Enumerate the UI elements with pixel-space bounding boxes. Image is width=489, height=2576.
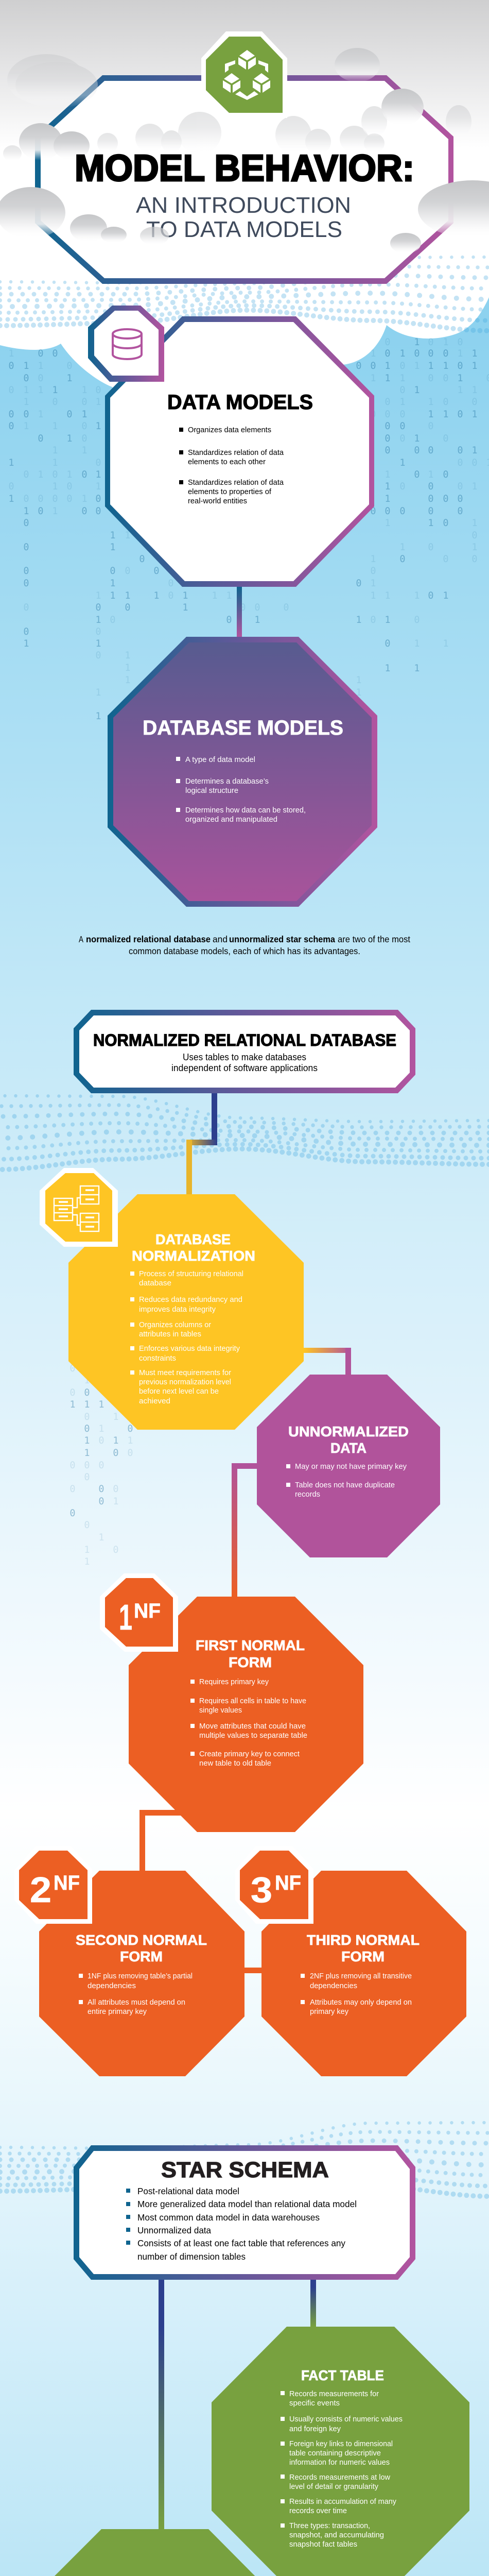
bullets: database normalization: before next level can be	[139, 1387, 219, 1396]
text: 01	[23, 373, 73, 384]
bullets: third normal form: 2NF plus removing all transitive	[310, 1972, 412, 1980]
bullets: first normal form: new table to old table	[199, 1759, 271, 1768]
text: 00	[38, 348, 58, 359]
text: 0	[356, 578, 362, 589]
bullets: data models: Standardizes relation of data	[188, 449, 284, 457]
text: 101	[95, 615, 260, 625]
text: 1	[98, 1532, 104, 1543]
subheading text: Uses tables to make databases	[183, 1052, 306, 1062]
bullets: database normalization	[130, 1270, 243, 1405]
text: 0	[110, 615, 116, 625]
text: 1111	[110, 590, 188, 601]
text: 000	[69, 1460, 104, 1471]
text: 1	[8, 457, 14, 468]
text: 111	[69, 1399, 104, 1410]
bullets: second normal form: dependencies	[88, 1982, 136, 1990]
text: 01	[23, 578, 116, 589]
panel: normalized relational database	[74, 1010, 415, 1093]
subheading text: independent of software applications	[171, 1063, 318, 1073]
heading: second normal form	[76, 1932, 207, 1964]
text: 10	[385, 481, 434, 492]
bullets: fact table: Three types: transaction,	[289, 2522, 370, 2530]
heading: database normalization: DATABASE	[155, 1231, 231, 1247]
text: 1	[113, 1496, 119, 1507]
text: 1	[98, 1423, 104, 1434]
bullets: first normal form: multiple values to separate table	[199, 1732, 307, 1740]
text: 11000	[370, 373, 489, 384]
text: 1	[52, 385, 58, 396]
text: 0	[98, 1484, 104, 1495]
text: 1	[414, 385, 420, 396]
bullets: data models: elements to each other	[188, 458, 266, 466]
text: 1101	[428, 409, 478, 420]
heading: star schema: STAR SCHEMA	[161, 2158, 329, 2182]
text block: intro: are two of the most	[338, 934, 410, 944]
heading: database models: DATABASE MODELS	[143, 717, 343, 739]
text block: intro: unnormalized star schema	[229, 934, 335, 944]
text: 11	[385, 469, 434, 480]
bullets: unnormalized data	[286, 1463, 407, 1499]
text: 100	[370, 554, 478, 565]
text: 000	[370, 409, 406, 420]
text block: intro: normalized relational database	[86, 934, 211, 944]
bullets: first normal form: Create primary key to connect	[199, 1750, 300, 1758]
bullets: fact table: and foreign key	[289, 2425, 341, 2433]
text: 11	[370, 348, 463, 359]
icon: 3NF badge: 3	[251, 1870, 272, 1910]
text: 1	[84, 1375, 90, 1386]
bullets: second normal form: entire primary key	[88, 2008, 147, 2016]
text: 0	[84, 1520, 90, 1531]
bullets: star schema: Consists of at least one fact table that references any	[137, 2238, 345, 2248]
text: 11	[385, 663, 420, 674]
panel: dimension table	[26, 2529, 284, 2576]
text: 11	[23, 638, 101, 649]
heading: first normal form: FORM	[229, 1654, 272, 1670]
bullets: database normalization: Organizes columns or	[139, 1321, 211, 1329]
heading: third normal form: THIRD NORMAL	[307, 1932, 420, 1948]
bullets: database models: logical structure	[185, 787, 238, 795]
text: 1	[95, 687, 101, 698]
text: 0	[38, 373, 44, 384]
text: 01	[38, 433, 73, 444]
bullets: database normalization: Reduces data redundancy and	[139, 1296, 242, 1304]
bullets: second normal form: 1NF plus removing table’s partial	[88, 1972, 193, 1980]
text: 0011101	[356, 361, 478, 371]
text: 10	[52, 457, 101, 468]
text: 11	[385, 373, 463, 384]
icon: green cubes badge	[201, 31, 287, 118]
heading: first normal form: FIRST NORMAL	[196, 1637, 305, 1653]
bullets: data models	[179, 426, 284, 505]
text: 0001	[8, 409, 88, 420]
text: 1	[8, 348, 14, 359]
heading: unnormalized data	[288, 1423, 409, 1456]
bullets: database models: Determines a database’s	[185, 777, 269, 786]
heading: unnormalized data: UNNORMALIZED	[288, 1423, 409, 1439]
text: 11	[84, 1435, 119, 1446]
bullets: third normal form: Attributes may only depend on	[310, 1998, 412, 2007]
text: 1	[125, 530, 131, 541]
icon: 2NF badge	[14, 1846, 92, 1924]
bullets: fact table: Records measurements at low	[289, 2473, 391, 2482]
bullets: data models: Standardizes relation of data	[188, 479, 284, 487]
text: 1001	[23, 397, 101, 408]
bullets: fact table: specific events	[289, 2399, 340, 2408]
text: 10	[38, 361, 73, 371]
text: 01	[23, 542, 116, 553]
text: 0010	[385, 337, 463, 348]
text: 10	[84, 1448, 119, 1459]
text block: intro: A	[79, 934, 83, 944]
bullets: database normalization: Process of structuring relational	[139, 1270, 243, 1278]
bullets: fact table: table containing descriptive	[289, 2449, 381, 2458]
panel: star schema	[74, 2145, 415, 2280]
bullets: first normal form: Requires all cells in table to have	[199, 1697, 306, 1705]
text: 101	[399, 542, 478, 553]
text: 1	[414, 337, 420, 348]
icon: 3NF badge: NF	[275, 1872, 301, 1894]
text: 0	[23, 518, 29, 529]
text: 0000	[23, 602, 289, 613]
bullets: star schema: More generalized data model than relational data model	[137, 2199, 357, 2209]
bullets: first normal form	[190, 1678, 307, 1768]
bullets: third normal form	[301, 1972, 412, 2016]
panel: database models	[108, 637, 377, 907]
panel: data models	[105, 316, 374, 587]
bullets: database normalization: attributes in tables	[139, 1330, 201, 1338]
text: 1	[125, 663, 131, 673]
bullets: third normal form: primary key	[310, 2008, 349, 2016]
text: 00	[370, 615, 420, 625]
heading: fact table: FACT TABLE	[301, 2367, 384, 2383]
text: 0	[84, 1387, 90, 1398]
bullets: database normalization: achieved	[139, 1397, 170, 1405]
icon: 2NF badge: NF	[54, 1872, 80, 1894]
subtitle: TO DATA MODELS	[146, 217, 342, 242]
text: 0	[84, 1472, 90, 1483]
text: 0	[399, 554, 406, 565]
text: 1	[38, 409, 44, 420]
text: 1	[52, 506, 58, 517]
text: 0	[139, 554, 145, 565]
text: 0	[69, 1387, 76, 1398]
text: 0	[69, 1363, 76, 1374]
bullets: star schema: Most common data model in data warehouses	[137, 2212, 320, 2223]
text: 01100	[385, 397, 478, 408]
bullets: database normalization: constraints	[139, 1354, 176, 1363]
bullets: database normalization: Must meet requirements for	[139, 1369, 231, 1377]
panel: second normal form	[39, 1871, 244, 2076]
text: 011	[399, 385, 478, 396]
subtitle	[136, 193, 351, 242]
text: 010001	[385, 348, 478, 359]
bullets: fact table: Records measurements for	[289, 2390, 379, 2398]
text: 1	[110, 530, 116, 541]
text: 0	[428, 421, 434, 432]
text: 110	[23, 421, 88, 432]
text: 00001	[385, 445, 478, 456]
panel: title	[35, 75, 453, 284]
icon: database badge	[88, 306, 164, 382]
text: 01	[95, 650, 131, 661]
icon: 1NF badge: 1	[119, 1597, 132, 1637]
bullets: fact table: records over time	[289, 2507, 347, 2515]
text: 0	[127, 1448, 133, 1459]
bullets: fact table: snapshot fact tables	[289, 2540, 357, 2549]
heading: second normal form: SECOND NORMAL	[76, 1932, 207, 1948]
text block: intro: and	[213, 934, 228, 944]
text: 0	[370, 566, 376, 577]
bullets: database normalization: database	[139, 1279, 171, 1287]
text: 0	[471, 530, 478, 541]
bullets: first normal form: Move attributes that could have	[199, 1722, 306, 1731]
bullets: star schema: Unnormalized data	[137, 2225, 211, 2235]
text: 1	[356, 675, 362, 686]
text: 1	[370, 578, 376, 589]
bullets: data models: elements to properties of	[188, 488, 272, 496]
heading: third normal form	[307, 1932, 420, 1964]
text: 1	[95, 711, 101, 722]
text: 1000	[23, 506, 101, 517]
heading: second normal form: FORM	[120, 1948, 163, 1964]
bullets: first normal form: Requires primary key	[199, 1678, 269, 1686]
title text: MODEL BEHAVIOR:	[75, 148, 414, 189]
panel: third normal form	[261, 1871, 466, 2076]
text: 0	[385, 638, 391, 649]
bullets: second normal form: All attributes must depend on	[88, 1998, 185, 2007]
panel: unnormalized data	[257, 1375, 440, 1557]
bullets: fact table: information for numeric values	[289, 2459, 390, 2467]
panel: database normalization	[68, 1194, 304, 1430]
text: 0	[127, 1423, 133, 1434]
text: 01	[399, 361, 420, 371]
text: 0	[168, 578, 174, 589]
bullets: star schema: Post-relational data model	[137, 2186, 239, 2196]
bullets: unnormalized data: May or may not have primary key	[295, 1463, 407, 1471]
text: 11	[385, 518, 478, 529]
text: 1	[356, 687, 362, 698]
heading: database normalization	[132, 1231, 255, 1264]
text: 10	[84, 1545, 119, 1555]
bullets: unnormalized data: records	[295, 1490, 320, 1499]
subheading text	[171, 1052, 318, 1073]
text: 01	[84, 1412, 119, 1422]
text: 0	[84, 1423, 90, 1434]
text: 00	[414, 469, 449, 480]
title text	[75, 148, 414, 242]
text: 10	[8, 494, 101, 504]
text: 00001	[23, 494, 88, 504]
heading: data models: DATA MODELS	[167, 391, 313, 414]
bullets: star schema	[126, 2186, 357, 2262]
text: 11	[414, 638, 449, 649]
text: 0101	[8, 481, 101, 492]
panel: first normal form	[129, 1597, 363, 1832]
heading: first normal form	[196, 1637, 305, 1670]
heading: normalized relational database: NORMALIZED RELATIONAL DATABASE	[93, 1031, 396, 1049]
bullets: fact table: Usually consists of numeric values	[289, 2415, 403, 2424]
text: 0	[81, 433, 88, 444]
bullets: data models: Organizes data elements	[188, 426, 271, 434]
heading: database normalization: NORMALIZATION	[132, 1248, 255, 1264]
text: 0	[69, 1508, 76, 1519]
text: 01	[385, 433, 420, 444]
text: 1011	[95, 590, 232, 601]
icon: 3NF badge	[235, 1846, 313, 1924]
heading: third normal form: FORM	[341, 1948, 385, 1964]
text block: intro	[79, 934, 410, 956]
text: 11	[356, 615, 391, 625]
bullets: data models: real-world entities	[188, 497, 247, 505]
bullets: fact table: Results in accumulation of many	[289, 2498, 397, 2506]
heading: unnormalized data: DATA	[330, 1440, 366, 1456]
text: 0101	[23, 469, 73, 480]
text: 0	[23, 626, 29, 637]
text: 0	[95, 626, 101, 637]
bullets: database models: organized and manipulated	[185, 816, 277, 824]
text: 001	[399, 481, 478, 492]
bullets: fact table: Foreign key links to dimensional	[289, 2440, 393, 2448]
text: 01	[8, 361, 29, 371]
text: 1	[399, 457, 406, 468]
text: 001	[95, 602, 188, 613]
bullets: database models: Determines how data can be stored,	[185, 806, 306, 815]
text: 1000	[385, 494, 463, 504]
icon: 1NF badge: NF	[134, 1600, 161, 1622]
text: 00	[399, 433, 449, 444]
text: 01	[98, 1435, 133, 1446]
text: 01	[428, 590, 449, 601]
bullets: database normalization: Enforces various data integrity	[139, 1345, 240, 1353]
text: 000	[23, 566, 160, 577]
text block: intro: common database models, each of which has its advantages.	[129, 946, 360, 956]
text: 01	[81, 469, 101, 480]
bullets: fact table	[281, 2390, 403, 2549]
text: 00	[69, 1484, 119, 1495]
text: 00	[385, 421, 406, 432]
bullets: database models: A type of data model	[185, 756, 255, 764]
text: 1	[84, 1556, 90, 1567]
icon: 1NF badge	[100, 1573, 178, 1652]
text: 11	[52, 445, 88, 456]
subtitle: AN INTRODUCTION	[136, 193, 351, 218]
bullets: third normal form: dependencies	[310, 1982, 357, 1990]
text: 0	[125, 566, 131, 577]
bullets: star schema: number of dimension tables	[137, 2251, 246, 2262]
text: 10	[428, 518, 449, 529]
text: 111	[370, 590, 420, 601]
panel: fact table	[212, 2327, 469, 2576]
text: 0	[98, 1496, 104, 1507]
bullets: first normal form: single values	[199, 1706, 242, 1715]
bullets: second normal form	[79, 1972, 193, 2016]
icon: tables badge	[40, 1168, 118, 1247]
text: 01	[8, 421, 101, 432]
icon: 2NF badge: 2	[30, 1870, 51, 1910]
text: 1	[125, 675, 131, 686]
bullets: database normalization: improves data integrity	[139, 1306, 216, 1314]
bullets: fact table: snapshot, and accumulating	[289, 2531, 384, 2539]
text: 01110	[8, 385, 101, 396]
bullets: database normalization: previous normalization level	[139, 1378, 231, 1386]
text: 00000	[370, 506, 463, 517]
bullets: unnormalized data: Table does not have duplicate	[295, 1481, 395, 1489]
bullets: fact table: level of detail or granularity	[289, 2483, 379, 2491]
bullets: database models	[176, 756, 306, 824]
